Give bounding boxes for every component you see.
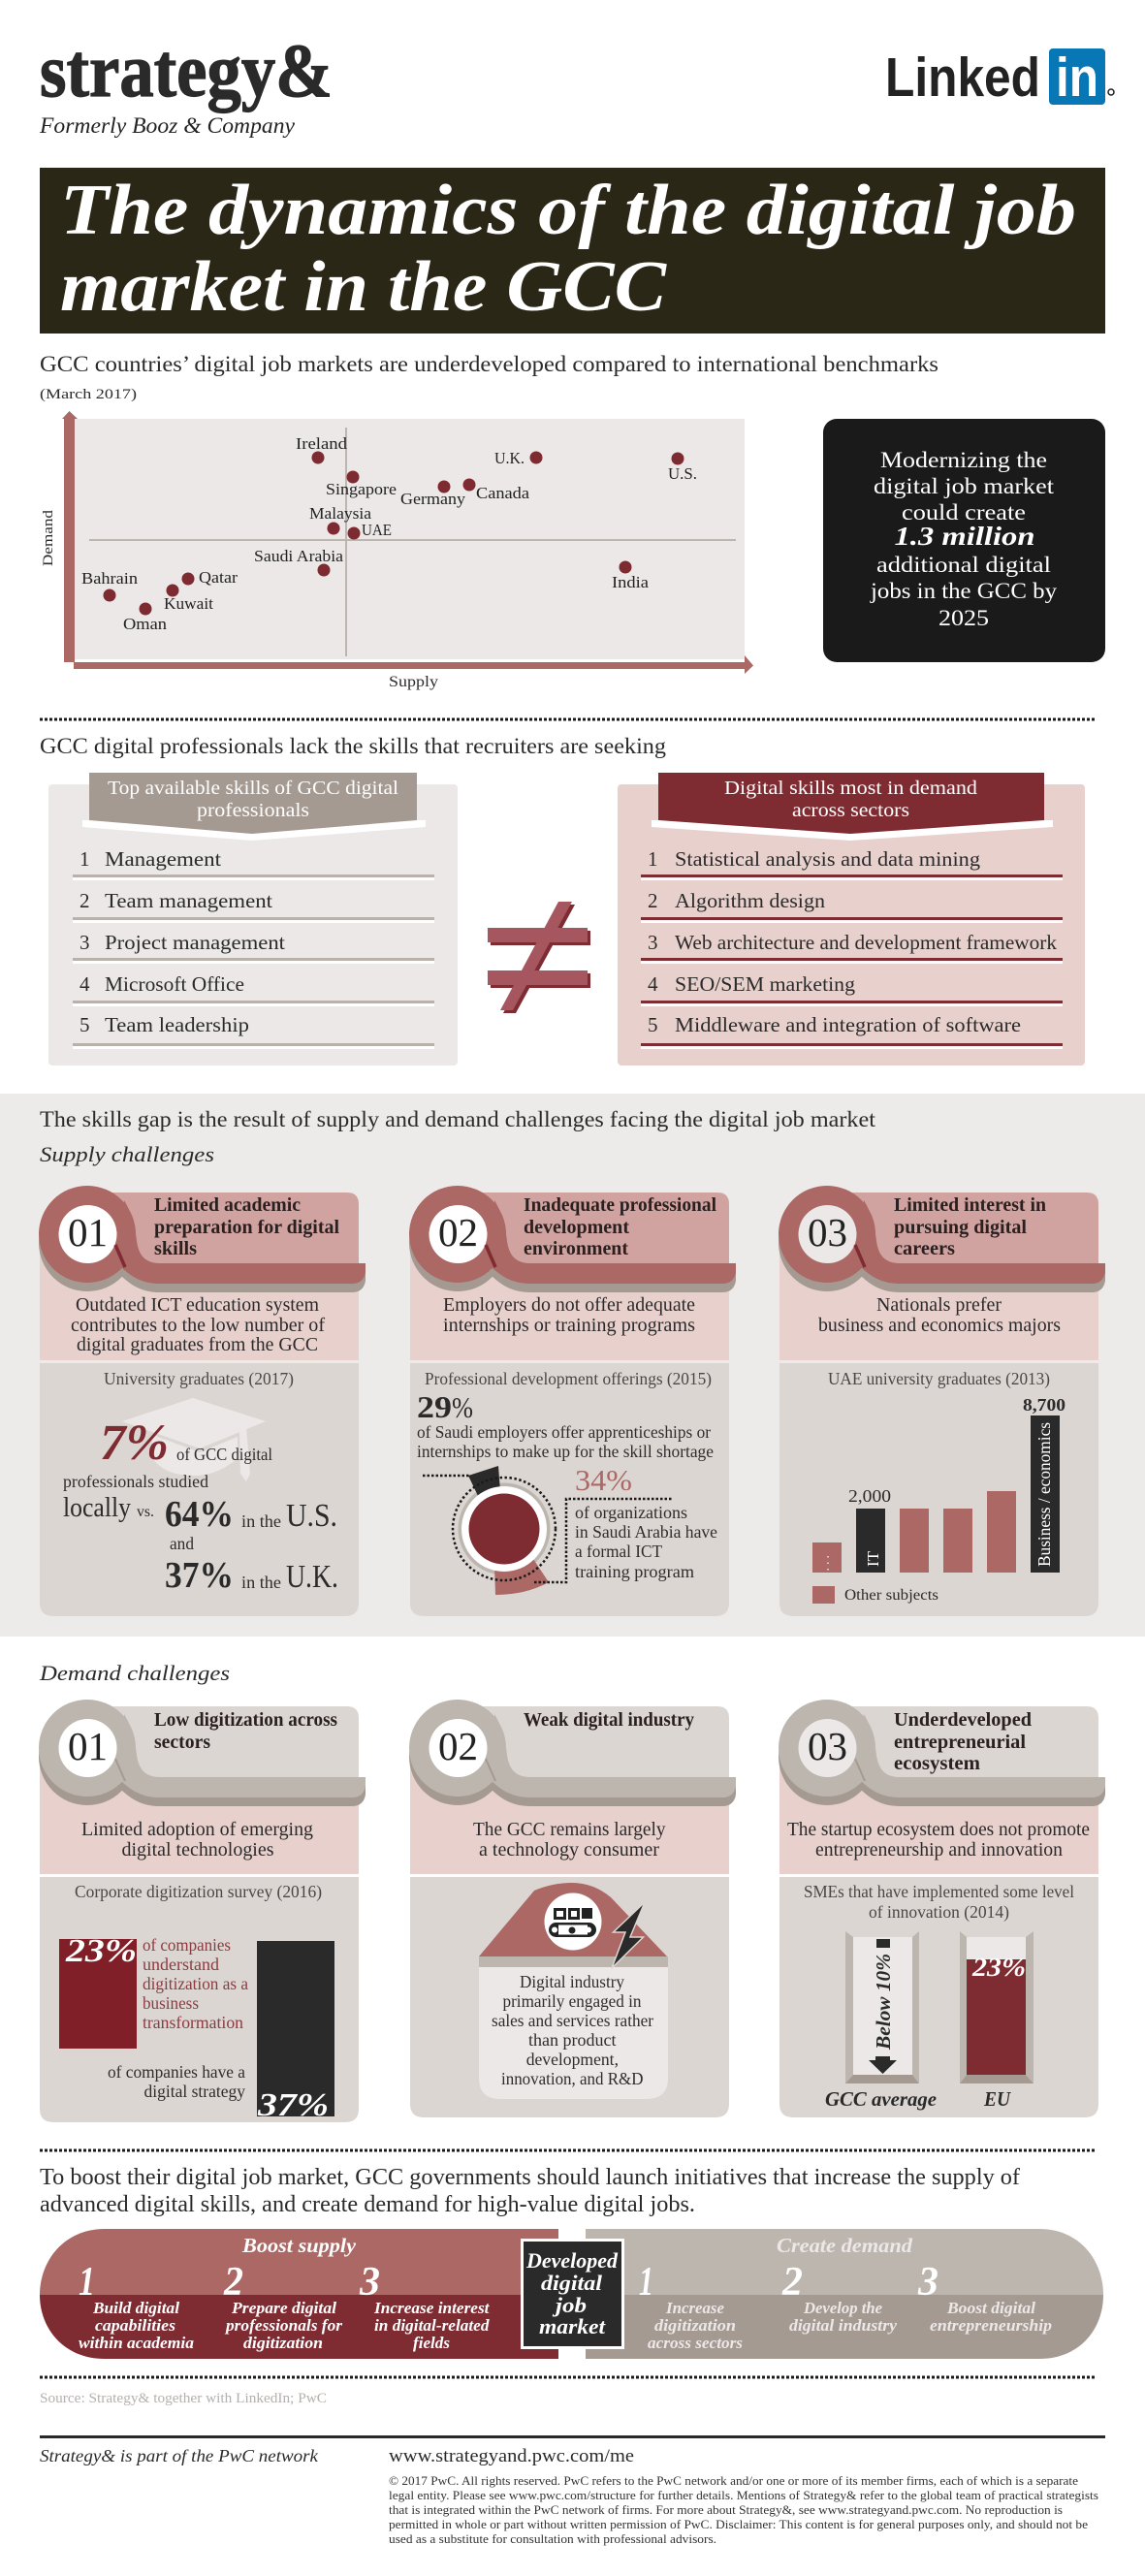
panel: skills in demand: 3 (648, 931, 657, 954)
panel: demand 01: digital strategy (143, 2082, 245, 2101)
scatter chart: demand vs supply: U.S. (668, 464, 697, 483)
panel: supply 01: 64% (165, 1494, 234, 1535)
panel: supply 03: Nationals prefer (876, 1295, 1002, 1316)
bar: GCC average (825, 1931, 937, 2111)
icon: factory house (479, 1883, 668, 2099)
panel: supply 02: Inadequate professional (524, 1194, 716, 1216)
center box: developed digital job market: digital (541, 2271, 603, 2295)
scatter chart: demand vs supply: Kuwait (164, 594, 213, 613)
donut chart (423, 1466, 673, 1595)
panel: supply 01: professionals studied (63, 1472, 208, 1491)
panel: boost supply: capabilities (95, 2316, 175, 2335)
heading: benchmarks: GCC countries’ digital job markets are underdeveloped compared to international benchmarks (40, 352, 938, 377)
footer: network: Strategy& is part of the PwC network (40, 2446, 319, 2465)
panel: demand 03: entrepreneurship and innovation (815, 1840, 1063, 1860)
panel: available skills: Project management (105, 931, 285, 954)
callout: 1.3 million jobs (823, 419, 1105, 662)
panel: available skills: professionals (197, 800, 309, 821)
panel: demand 01: understand (143, 1955, 219, 1974)
bar chart: UAE graduates: Business / economics (1034, 1422, 1054, 1567)
panel: demand 01: business (143, 1993, 199, 2013)
panel: boost supply: professionals for (224, 2316, 343, 2335)
scatter chart: demand vs supply: Singapore (326, 480, 397, 498)
panel: demand 01: of companies (143, 1935, 231, 1955)
center box: developed digital job market (521, 2239, 624, 2349)
panel: create demand: 2 (781, 2260, 803, 2305)
scatter chart: demand vs supply (41, 411, 753, 690)
panel: create demand: 3 (917, 2260, 938, 2305)
panel: demand 03: ecosystem (894, 1753, 980, 1774)
text block: recommendation: To boost their digital job market, GCC governments should launch initiatives that increase the supply of (40, 2165, 1020, 2190)
callout: 1.3 million jobs: additional digital (876, 553, 1051, 577)
panel: demand 02 (409, 1700, 736, 2117)
heading: benchmarks (40, 352, 938, 402)
panel: supply 03: pursuing digital (894, 1217, 1027, 1238)
scatter chart: demand vs supply: India (612, 573, 650, 591)
panel: boost supply: in digital-related (374, 2316, 490, 2335)
center box: developed digital job market: Developed (525, 2248, 619, 2273)
scatter chart: demand vs supply: Germany (400, 490, 466, 508)
source: Source: Strategy& together with LinkedIn; PwC (40, 2391, 327, 2406)
logo: LinkedIn: Linked (885, 47, 1040, 109)
panel: demand 01: 01 (68, 1724, 108, 1768)
panel: supply 01: Limited academic (154, 1194, 301, 1216)
callout: 1.3 million jobs: 1.3 million (894, 522, 1035, 551)
panel: boost supply: Prepare digital (231, 2299, 336, 2317)
panel: boost supply (40, 2229, 558, 2359)
panel: supply 02: environment (524, 1238, 628, 1259)
icon: not equal sign (488, 902, 590, 1013)
heading: skills: GCC digital professionals lack the skills that recruiters are seeking (40, 734, 666, 759)
panel: skills in demand: 5 (648, 1013, 657, 1036)
panel: demand 02: The GCC remains largely (473, 1820, 666, 1840)
panel: create demand: across sectors (648, 2334, 743, 2352)
panel: supply 03: careers (894, 1238, 955, 1259)
scatter chart: demand vs supply: U.K. (494, 449, 525, 467)
bar chart: UAE graduates: 2,000 (848, 1486, 891, 1506)
panel: skills in demand: Statistical analysis and data mining (675, 847, 981, 871)
logo: strategy&: Formerly Booz & Company (39, 113, 296, 138)
panel: demand 02: development, (526, 2050, 619, 2069)
panel: supply 01: of GCC digital (176, 1445, 272, 1464)
panel: demand 01: transformation (143, 2013, 243, 2032)
panel: boost supply: 2 (223, 2260, 243, 2305)
panel: supply 02: 34% (575, 1463, 632, 1497)
scatter chart: demand vs supply: Ireland (296, 434, 348, 453)
panel: create demand: Boost digital (946, 2299, 1035, 2317)
panel: supply 02: % (452, 1390, 473, 1424)
panel: supply 01: in the (241, 1573, 281, 1592)
panel: supply 01: skills (154, 1238, 197, 1259)
panel: boost supply: Increase interest (373, 2299, 490, 2317)
panel: supply 02: 02 (438, 1210, 478, 1255)
panel: demand 01: Corporate digitization survey (2016) (75, 1882, 322, 1901)
title: market in the GCC (60, 247, 668, 327)
scatter chart: demand vs supply: UAE (362, 521, 392, 539)
panel: skills in demand: 2 (648, 889, 657, 912)
callout: 1.3 million jobs: digital job market (874, 474, 1055, 498)
panel: supply 03: 03 (808, 1210, 847, 1255)
panel: supply 02: development (524, 1217, 629, 1238)
panel: supply 03 (779, 1186, 1105, 1616)
icon: conveyor belt (549, 1908, 596, 1937)
panel: demand 02: than product (528, 2030, 617, 2050)
panel: available skills: 1 (80, 847, 89, 871)
panel: demand 02: Digital industry (520, 1972, 624, 1991)
panel: available skills (48, 773, 458, 1065)
panel: available skills: 5 (80, 1013, 89, 1036)
icon: graduation cap (122, 1398, 266, 1481)
panel: demand 01: Low digitization across (154, 1709, 337, 1731)
bar: EU: 23% (971, 1953, 1026, 1982)
panel: demand 02: 02 (438, 1724, 478, 1768)
panel: skills in demand (618, 773, 1085, 1065)
panel: available skills: Team leadership (105, 1013, 249, 1036)
panel: boost supply: digitization (243, 2334, 323, 2352)
panel: boost supply: Boost supply (241, 2234, 357, 2257)
panel: available skills: Team management (105, 889, 272, 912)
bar: EU (960, 1931, 1034, 2111)
panel: demand 01: Limited adoption of emerging (81, 1820, 313, 1840)
scatter chart: demand vs supply: Demand (41, 509, 56, 566)
panel: create demand: Increase (665, 2299, 724, 2317)
panel: supply 01: contributes to the low number of (71, 1316, 326, 1336)
panel: supply 02: internships to make up for the skill shortage (417, 1442, 714, 1461)
panel: create demand: digitization (654, 2316, 736, 2335)
panel: supply 02: training program (575, 1562, 694, 1581)
panel: demand 03 (779, 1700, 1105, 2117)
panel: skills in demand: Digital skills most in demand (724, 778, 977, 799)
scatter chart: demand vs supply: Saudi Arabia (254, 547, 344, 565)
panel: supply 02: 29 (417, 1389, 452, 1424)
panel: supply 01: 37% (165, 1555, 234, 1596)
heading: benchmarks: (March 2017) (40, 387, 137, 402)
logo: LinkedIn: in (1056, 47, 1098, 109)
panel: demand 02: Weak digital industry (524, 1709, 694, 1731)
panel: demand 01: 23% (65, 1933, 137, 1969)
panel: supply 02: in Saudi Arabia have (575, 1522, 717, 1542)
bar chart: UAE graduates: IT (864, 1550, 882, 1567)
callout: 1.3 million jobs: jobs in the GCC by (870, 579, 1058, 603)
title (40, 168, 1105, 334)
bar chart: UAE graduates: Other subjects (844, 1587, 938, 1604)
panel: supply 01: and (170, 1534, 194, 1553)
panel: available skills: 3 (80, 931, 89, 954)
title: The dynamics of the digital job (60, 171, 1076, 250)
bar chart: UAE graduates: 8,700 (1023, 1395, 1065, 1415)
logo: strategy&: strategy& (40, 28, 333, 112)
center box: developed digital job market: market (539, 2314, 606, 2338)
panel: create demand: digital industry (789, 2316, 898, 2335)
panel: create demand: Create demand (777, 2234, 913, 2257)
panel: supply 01: U.S. (286, 1498, 337, 1534)
panel: demand 01: of companies have a (108, 2062, 245, 2082)
panel: create demand (586, 2229, 1103, 2359)
scatter chart: demand vs supply: Supply (389, 674, 438, 690)
panel: boost supply: 1 (79, 2260, 95, 2305)
text block: recommendation (40, 2165, 1020, 2217)
panel: supply 02: Employers do not offer adequate (443, 1295, 695, 1316)
panel: demand 03: The startup ecosystem does not promote (787, 1820, 1090, 1840)
panel: supply 01: vs. (137, 1504, 154, 1520)
panel: demand 01: digitization as a (143, 1974, 248, 1993)
axis arrows (62, 411, 753, 674)
panel: supply 02 (409, 1186, 736, 1616)
heading: demand challenges: Demand challenges (39, 1661, 230, 1685)
panel: boost supply: 3 (359, 2260, 380, 2305)
panel: demand 01: digital technologies (122, 1840, 273, 1860)
heading: supply challenges: Supply challenges (40, 1142, 214, 1166)
icon: lightning bolt (612, 1902, 645, 1968)
panel: supply 02: of organizations (575, 1503, 687, 1522)
panel: create demand: 1 (639, 2260, 653, 2305)
panel: supply 02: of Saudi employers offer apprenticeships or (417, 1422, 711, 1442)
callout: 1.3 million jobs: 2025 (938, 606, 989, 630)
footer: website and legal (389, 2446, 1098, 2546)
panel: supply 01 (39, 1186, 366, 1616)
panel: demand 03: entrepreneurial (894, 1732, 1026, 1753)
panel: demand 01: sectors (154, 1732, 210, 1753)
panel: demand 02: primarily engaged in (502, 1991, 642, 2011)
panel: boost supply: within academia (79, 2334, 194, 2352)
footer: website and legal: www.strategyand.pwc.com/me (389, 2446, 634, 2466)
panel: supply 02: Professional development offerings (2015) (425, 1369, 712, 1388)
panel: skills in demand: across sectors (792, 800, 909, 821)
panel: skills in demand: SEO/SEM marketing (675, 972, 856, 996)
panel: demand 01: 37% (257, 2087, 329, 2123)
footer: website and legal: legal entity. Please see www.pwc.com/structure for further details. Mentions of Strategy& refer to the global team of practical strategists (389, 2489, 1098, 2502)
panel: supply 01: locally (63, 1493, 131, 1523)
footer: website and legal: © 2017 PwC. All rights reserved. PwC refers to the PwC network and/or one or more of its member firms, each of which is a separate (389, 2474, 1078, 2488)
scatter chart: demand vs supply: Malaysia (309, 504, 372, 523)
panel: supply 01: digital graduates from the GCC (77, 1335, 318, 1355)
scatter chart: demand vs supply: Bahrain (81, 569, 138, 588)
panel: supply 01: 7% (100, 1415, 169, 1471)
scatter chart: demand vs supply: Canada (476, 484, 530, 502)
panel: supply 01: in the (241, 1511, 281, 1531)
panel: available skills: 2 (80, 889, 89, 912)
panel: supply 02: a formal ICT (575, 1542, 662, 1561)
panel: demand 01 (39, 1700, 366, 2123)
panel: skills in demand: Algorithm design (675, 889, 826, 912)
bar chart: UAE graduates (812, 1395, 1065, 1604)
panel: demand 02: sales and services rather (492, 2011, 653, 2030)
panel: available skills: Management (105, 847, 221, 871)
panel: create demand: Develop the (803, 2299, 882, 2317)
panel: background band for supply challenges (0, 1094, 1145, 1637)
panel: supply 01: 01 (68, 1210, 108, 1255)
panel: skills in demand: Middleware and integration of software (675, 1013, 1021, 1036)
panel: available skills: 4 (80, 972, 90, 996)
bar: GCC average: GCC average (825, 2087, 937, 2111)
panel: demand 03: 03 (808, 1724, 847, 1768)
panel: boost supply: Build digital (92, 2299, 179, 2317)
panel: supply 03: Limited interest in (894, 1194, 1046, 1216)
footer: website and legal: used as a substitute for consultation with professional advisors. (389, 2532, 716, 2546)
panel: skills in demand: 4 (648, 972, 658, 996)
callout: 1.3 million jobs: could create (902, 500, 1026, 525)
panel: supply 03: business and economics majors (818, 1316, 1061, 1336)
bar: GCC average: Below 10% (872, 1954, 895, 2051)
panel: demand 03: of innovation (2014) (869, 1902, 1009, 1922)
bar: EU: EU (983, 2087, 1012, 2111)
panel: skills in demand: 1 (648, 847, 657, 871)
panel: supply 02: internships or training programs (443, 1316, 695, 1336)
scatter chart: demand vs supply: Qatar (199, 568, 239, 587)
panel: demand 03: SMEs that have implemented some level (804, 1882, 1074, 1901)
footer: website and legal: that is integrated within the PwC network of firms. For more about Strategy&, see www.strategyand.pwc.com. No reproduction is (389, 2503, 1063, 2517)
panel: supply 01: U.K. (286, 1559, 338, 1595)
heading: skills gap: The skills gap is the result of supply and demand challenges facing the digital job market (40, 1107, 875, 1132)
panel: skills in demand: Web architecture and development framework (675, 931, 1057, 954)
callout: 1.3 million jobs: Modernizing the (880, 448, 1047, 472)
panel: available skills: Top available skills of GCC digital (108, 778, 398, 799)
panel: demand 02: a technology consumer (479, 1840, 660, 1860)
center box: developed digital job market: job (553, 2293, 587, 2317)
panel: create demand: entrepreneurship (930, 2316, 1052, 2335)
panel: supply 01: Outdated ICT education system (76, 1295, 319, 1316)
scatter chart: demand vs supply: Oman (123, 615, 167, 633)
panel: supply 03: UAE university graduates (2013) (828, 1369, 1050, 1388)
panel: demand 02: innovation, and R&D (501, 2069, 644, 2088)
panel: supply 01: preparation for digital (154, 1217, 339, 1238)
panel: supply 01: University graduates (2017) (104, 1369, 294, 1388)
panel: boost supply: fields (413, 2334, 450, 2352)
text block: recommendation: advanced digital skills, and create demand for high-value digital jobs. (40, 2192, 695, 2217)
panel: demand 03: Underdeveloped (894, 1709, 1032, 1731)
panel: available skills: Microsoft Office (105, 972, 244, 996)
footer: website and legal: permitted in whole or part without written permission of PwC. Disclaimer: This content is for general purposes only, and should not be (389, 2518, 1088, 2531)
